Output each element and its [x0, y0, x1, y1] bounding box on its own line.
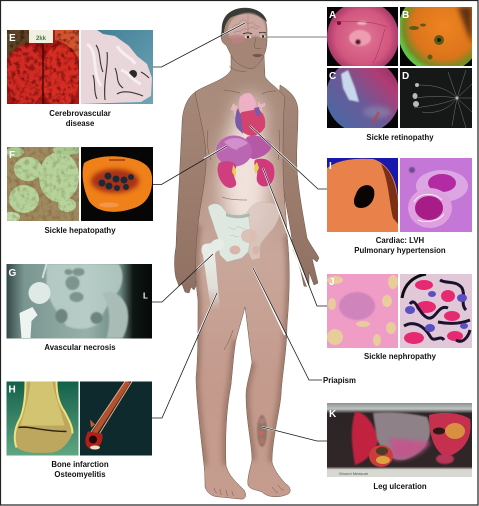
- panel I left: heart cross section: [327, 158, 398, 232]
- panel B: fundus photo: B: [402, 10, 409, 21]
- panel G: pelvis x-ray: G: [8, 268, 16, 279]
- panel J left: renal histology: [327, 274, 398, 348]
- pelvis: [202, 202, 280, 310]
- panel K: leg ulcer photo: [327, 403, 472, 477]
- torso light shading: [221, 95, 269, 238]
- face features: [243, 32, 266, 57]
- panel J right: glomerulus stain: [400, 274, 472, 348]
- panel D: fluorescein angiogram: [400, 68, 472, 128]
- left arm: [174, 91, 210, 293]
- connector: femur to bone infarction: [152, 293, 217, 418]
- panel F left: liver histology: [7, 147, 79, 221]
- panel G: pelvis x-ray: L: [143, 292, 148, 300]
- heart: [230, 93, 266, 136]
- connector: eye to retinopathy: [267, 36, 327, 38]
- stomach and spleen: [245, 136, 272, 159]
- connector: kidney to nephropathy: [263, 168, 327, 306]
- leg ulcer: [257, 415, 267, 447]
- connector: priapism: [253, 268, 322, 380]
- panel I right: pulmonary histology: [400, 158, 472, 232]
- panel C: fundus photo: [327, 68, 398, 128]
- caption: cerebrovascular disease: disease: [66, 119, 95, 128]
- right kidney: [254, 159, 274, 186]
- liver: [216, 136, 252, 166]
- connector: heart to cardiac panel: [250, 126, 327, 189]
- panel J left: renal histology: J: [329, 277, 335, 288]
- panel G: pelvis x-ray: [6, 264, 152, 338]
- panel E left: brain surface photo: 2kk: [36, 36, 47, 42]
- human body illustration: [174, 8, 319, 499]
- panel F right: liver specimen: [81, 147, 153, 221]
- caption: cerebrovascular disease: Cerebrovascular: [49, 109, 111, 118]
- right arm: [278, 85, 319, 287]
- label: priapism: Priapism: [323, 376, 356, 385]
- panel B: fundus photo: [400, 7, 472, 66]
- connector: leg ulcer: [262, 427, 327, 441]
- panel H left: bone infarction specimen: H: [8, 384, 16, 396]
- body contour lines: [207, 66, 284, 496]
- caption: bone infarction and osteomyelitis: Osteomyelitis: [54, 470, 106, 479]
- panel E left: brain surface photo: [7, 30, 79, 104]
- caption: avascular necrosis: Avascular necrosis: [44, 343, 116, 352]
- panel A: fundus photo: A: [329, 10, 336, 21]
- torso and legs: [195, 55, 290, 499]
- panel C: fundus photo: C: [329, 71, 336, 82]
- panel A: fundus photo: [327, 7, 398, 66]
- connector: hip to avascular necrosis: [152, 254, 213, 302]
- panel K: leg ulcer photo: Wound Measure: [339, 471, 369, 476]
- caption: cardiac complications: Cardiac: LVH: [376, 236, 424, 245]
- brain overlay: [228, 13, 266, 44]
- left kidney: [218, 161, 236, 188]
- caption: bone infarction and osteomyelitis: Bone infarction: [51, 460, 109, 469]
- panel E left: brain surface photo: E: [9, 33, 16, 44]
- caption: cardiac complications: Pulmonary hypertension: [354, 246, 446, 255]
- panel I left: heart cross section: I: [329, 161, 332, 172]
- caption: leg ulceration: Leg ulceration: [373, 482, 427, 491]
- caption: sickle nephropathy: Sickle nephropathy: [364, 352, 437, 361]
- panel H right: osteomyelitis specimen: [80, 382, 152, 456]
- body edge shading: [196, 225, 289, 465]
- connector: liver to hepatopathy: [153, 146, 227, 184]
- connector: brain to cerebrovascular disease: [153, 23, 245, 67]
- panel D: fluorescein angiogram: D: [402, 71, 409, 82]
- head: [221, 8, 267, 69]
- panel F left: liver histology: F: [9, 150, 15, 161]
- panel H left: bone infarction specimen: [6, 382, 78, 456]
- hair: [222, 8, 267, 33]
- panel E right: brain section photo: [81, 30, 153, 104]
- caption: sickle hepatopathy: Sickle hepatopathy: [44, 226, 116, 235]
- caption: sickle retinopathy: Sickle retinopathy: [366, 133, 434, 142]
- panel K: leg ulcer photo: K: [329, 409, 337, 420]
